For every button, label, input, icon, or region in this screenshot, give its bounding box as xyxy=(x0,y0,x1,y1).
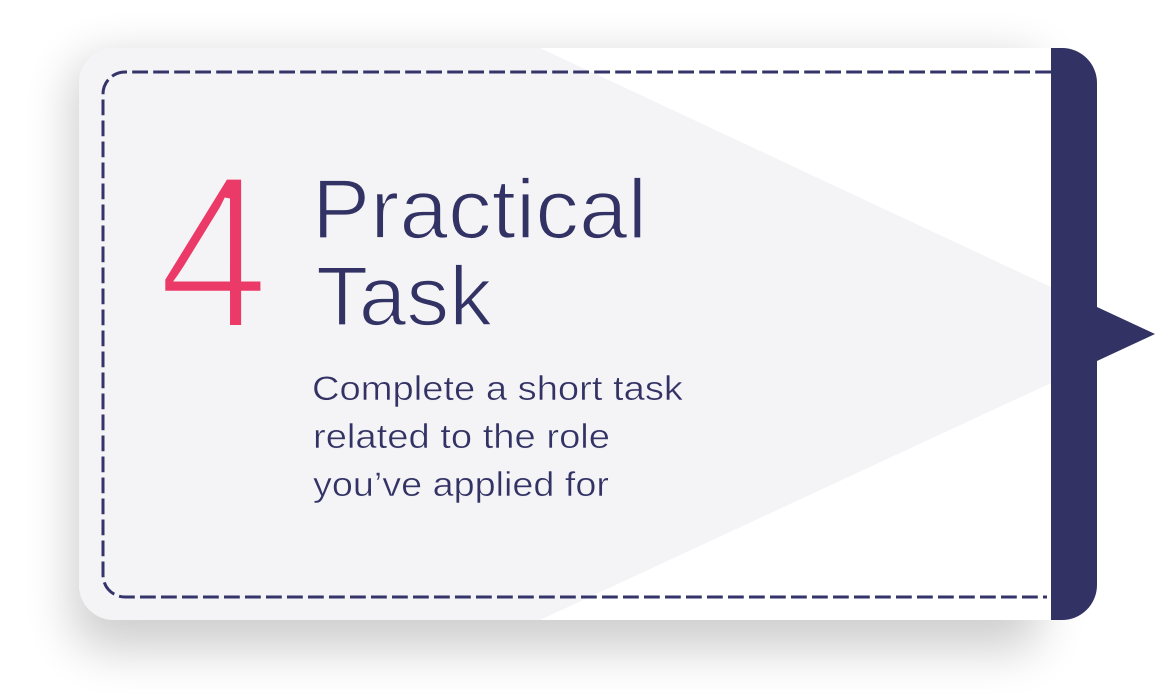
card background xyxy=(79,48,1097,620)
description: related to the role xyxy=(313,418,610,456)
description xyxy=(312,370,684,504)
light grey arrow panel xyxy=(79,48,1051,620)
heading: Practical xyxy=(312,162,647,256)
description: you’ve applied for xyxy=(313,466,609,504)
heading: Task xyxy=(316,249,493,343)
description: Complete a short task xyxy=(312,370,684,408)
navy side bar with pointer xyxy=(1051,48,1155,620)
card shadow xyxy=(72,58,1040,650)
heading xyxy=(312,162,647,343)
dashed border xyxy=(103,72,1051,597)
step number: 4 xyxy=(158,129,269,375)
